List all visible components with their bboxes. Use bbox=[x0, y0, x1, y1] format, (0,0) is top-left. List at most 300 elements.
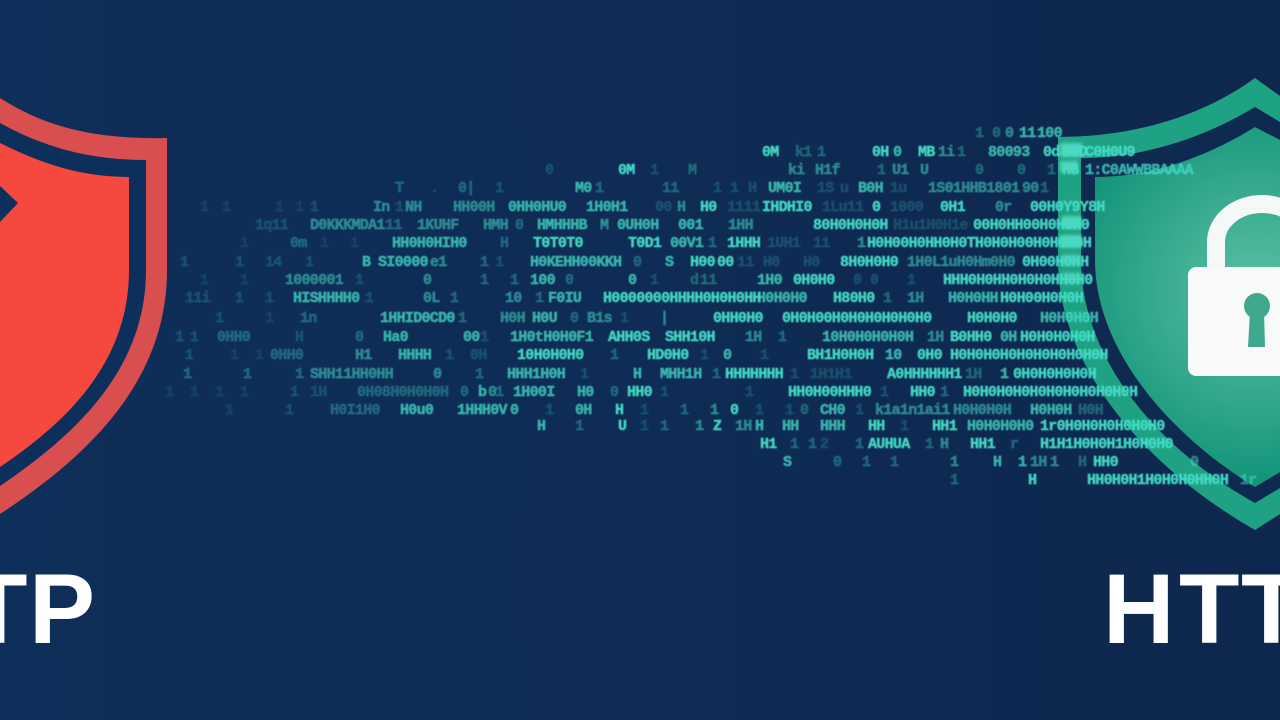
data stream: encrypted characters flowing from HTTP to HTTPS: 0 bbox=[565, 272, 574, 289]
data stream: encrypted characters flowing from HTTP to HTTPS: 1 bbox=[708, 235, 717, 252]
data stream: encrypted characters flowing from HTTP to HTTPS: 1 bbox=[957, 144, 966, 161]
data stream: encrypted characters flowing from HTTP to HTTPS: d bbox=[690, 272, 698, 289]
data stream: encrypted characters flowing from HTTP to HTTPS: HB bbox=[1062, 162, 1079, 179]
data stream: encrypted characters flowing from HTTP to HTTPS: 10H0H0H0H0H bbox=[822, 329, 913, 346]
data stream: encrypted characters flowing from HTTP to HTTPS: 1 bbox=[535, 290, 544, 307]
data stream: encrypted characters flowing from HTTP to HTTPS: 1 bbox=[495, 180, 504, 197]
data stream: encrypted characters flowing from HTTP to HTTPS: 0 bbox=[510, 402, 519, 419]
data stream: encrypted characters flowing from HTTP to HTTPS: 1H0H1 bbox=[586, 199, 628, 216]
data stream: encrypted characters flowing from HTTP to HTTPS: 1 bbox=[225, 402, 234, 419]
data stream: encrypted characters flowing from HTTP to HTTPS: AUHUA bbox=[868, 436, 910, 453]
data stream: encrypted characters flowing from HTTP to HTTPS: H1 bbox=[760, 436, 777, 453]
data stream: encrypted characters flowing from HTTP to HTTPS: H bbox=[633, 366, 641, 383]
data stream: encrypted characters flowing from HTTP to HTTPS: 0HH0 bbox=[270, 347, 304, 364]
data stream: encrypted characters flowing from HTTP to HTTPS: IHDHI0 bbox=[762, 199, 813, 216]
data stream: encrypted characters flowing from HTTP to HTTPS: HH bbox=[868, 418, 885, 435]
data stream: encrypted characters flowing from HTTP to HTTPS: 0d bbox=[1043, 144, 1060, 161]
data stream: encrypted characters flowing from HTTP to HTTPS: 0 bbox=[633, 254, 642, 271]
data stream: encrypted characters flowing from HTTP to HTTPS: 1 bbox=[695, 418, 704, 435]
data stream: encrypted characters flowing from HTTP to HTTPS: 14 bbox=[265, 254, 282, 271]
data stream: encrypted characters flowing from HTTP to HTTPS: AHH0S bbox=[608, 329, 650, 346]
data stream: encrypted characters flowing from HTTP to HTTPS: 1H bbox=[310, 384, 327, 401]
data stream: encrypted characters flowing from HTTP to HTTPS: M0 bbox=[575, 180, 592, 197]
data stream: encrypted characters flowing from HTTP to HTTPS: H0H0H0H bbox=[1040, 310, 1098, 327]
data stream: encrypted characters flowing from HTTP to HTTPS: 1 bbox=[877, 162, 886, 179]
data stream: encrypted characters flowing from HTTP to HTTPS: BH1H0H0H bbox=[807, 347, 873, 364]
data stream: encrypted characters flowing from HTTP to HTTPS: 0H0H00H0H0H0H0H0H0 bbox=[782, 310, 932, 327]
data stream: encrypted characters flowing from HTTP to HTTPS: 0 bbox=[800, 402, 809, 419]
data stream: encrypted characters flowing from HTTP to HTTPS: 0H bbox=[1000, 329, 1017, 346]
data stream: encrypted characters flowing from HTTP to HTTPS: Ha0 bbox=[383, 329, 409, 346]
data stream: encrypted characters flowing from HTTP to HTTPS: 1HH bbox=[728, 217, 753, 234]
data stream: encrypted characters flowing from HTTP to HTTPS: 1H bbox=[907, 290, 924, 307]
data stream: encrypted characters flowing from HTTP to HTTPS: 1 bbox=[862, 454, 871, 471]
data stream: encrypted characters flowing from HTTP to HTTPS: 1u bbox=[890, 180, 907, 197]
data stream: encrypted characters flowing from HTTP to HTTPS: 1 bbox=[940, 384, 949, 401]
data stream: encrypted characters flowing from HTTP to HTTPS: 1H0L1uH0Hm0H0 bbox=[907, 254, 1016, 271]
data stream: encrypted characters flowing from HTTP to HTTPS: 1 bbox=[575, 418, 584, 435]
data stream: encrypted characters flowing from HTTP to HTTPS: H0H0H0 bbox=[967, 310, 1018, 327]
data stream: encrypted characters flowing from HTTP to HTTPS: 1q11 bbox=[255, 217, 289, 234]
data stream: encrypted characters flowing from HTTP to HTTPS: ki bbox=[788, 162, 805, 179]
data stream: encrypted characters flowing from HTTP to HTTPS: 1 bbox=[925, 436, 934, 453]
data stream: encrypted characters flowing from HTTP to HTTPS: 0M bbox=[618, 162, 635, 179]
data stream: encrypted characters flowing from HTTP to HTTPS: 1 bbox=[480, 272, 489, 289]
data stream: encrypted characters flowing from HTTP to HTTPS: 0 bbox=[723, 347, 732, 364]
data stream: encrypted characters flowing from HTTP to HTTPS: 1 bbox=[495, 254, 504, 271]
data stream: encrypted characters flowing from HTTP to HTTPS: 0H1 bbox=[940, 199, 966, 216]
data stream: encrypted characters flowing from HTTP to HTTPS: 80H0H0H0H bbox=[813, 217, 888, 234]
data stream: encrypted characters flowing from HTTP to HTTPS: 0 bbox=[515, 217, 524, 234]
data stream: encrypted characters flowing from HTTP to HTTPS: b bbox=[478, 384, 487, 401]
data stream: encrypted characters flowing from HTTP to HTTPS: H0KEHH00KKH bbox=[530, 254, 621, 271]
data stream: encrypted characters flowing from HTTP to HTTPS: 1 bbox=[710, 402, 719, 419]
data stream: encrypted characters flowing from HTTP to HTTPS: 1 bbox=[700, 347, 709, 364]
data stream: encrypted characters flowing from HTTP to HTTPS: 1 bbox=[295, 366, 304, 383]
data stream: encrypted characters flowing from HTTP to HTTPS: 100 bbox=[1037, 125, 1063, 142]
data stream: encrypted characters flowing from HTTP to HTTPS: 11 bbox=[813, 235, 830, 252]
data stream: encrypted characters flowing from HTTP to HTTPS: r bbox=[1010, 436, 1018, 453]
data stream: encrypted characters flowing from HTTP to HTTPS: M bbox=[688, 162, 697, 179]
data stream: encrypted characters flowing from HTTP to HTTPS: 0HH0H0 bbox=[713, 310, 764, 327]
data stream: encrypted characters flowing from HTTP to HTTPS: 1HHH0V bbox=[457, 402, 508, 419]
data stream: encrypted characters flowing from HTTP to HTTPS: 1H bbox=[965, 366, 982, 383]
data stream: encrypted characters flowing from HTTP to HTTPS: H1 bbox=[355, 347, 372, 364]
data stream: encrypted characters flowing from HTTP to HTTPS: 00H0Y9Y8H bbox=[1030, 199, 1105, 216]
data stream: encrypted characters flowing from HTTP to HTTPS: H0I1H0 bbox=[330, 402, 381, 419]
data stream: encrypted characters flowing from HTTP to HTTPS: 0r bbox=[995, 199, 1012, 216]
data stream: encrypted characters flowing from HTTP to HTTPS: 1 bbox=[240, 235, 249, 252]
data stream: encrypted characters flowing from HTTP to HTTPS: 00 bbox=[463, 329, 480, 346]
data stream: encrypted characters flowing from HTTP to HTTPS: 0 bbox=[460, 384, 469, 401]
data stream: encrypted characters flowing from HTTP to HTTPS: 1 bbox=[365, 290, 374, 307]
data stream: encrypted characters flowing from HTTP to HTTPS: 1 bbox=[285, 402, 294, 419]
data stream: encrypted characters flowing from HTTP to HTTPS: 0 bbox=[893, 144, 902, 161]
data stream: encrypted characters flowing from HTTP to HTTPS: HHHH bbox=[398, 347, 431, 364]
data stream: encrypted characters flowing from HTTP to HTTPS: 1 bbox=[745, 384, 754, 401]
data stream: encrypted characters flowing from HTTP to HTTPS: H bbox=[940, 436, 948, 453]
data stream: encrypted characters flowing from HTTP to HTTPS: 2 bbox=[820, 436, 829, 453]
data stream: encrypted characters flowing from HTTP to HTTPS: 1 bbox=[222, 199, 231, 216]
data stream: encrypted characters flowing from HTTP to HTTPS: 0 bbox=[355, 329, 364, 346]
data stream: encrypted characters flowing from HTTP to HTTPS: 0H0H0H0H0H bbox=[1013, 366, 1096, 383]
data stream: encrypted characters flowing from HTTP to HTTPS: 1H0tH0H0F1 bbox=[510, 329, 594, 346]
data stream: encrypted characters flowing from HTTP to HTTPS: HH0H00HHH0 bbox=[788, 384, 872, 401]
data stream: encrypted characters flowing from HTTP to HTTPS: D0KKKMDA1 bbox=[310, 217, 385, 234]
data stream: encrypted characters flowing from HTTP to HTTPS: 1 bbox=[880, 384, 889, 401]
data stream: encrypted characters flowing from HTTP to HTTPS: HH00H bbox=[453, 199, 495, 216]
data stream: encrypted characters flowing from HTTP to HTTPS: 0 bbox=[488, 384, 497, 401]
data stream: encrypted characters flowing from HTTP to HTTPS: 1r0H0H0H0H0H0H0 bbox=[1040, 418, 1165, 435]
data stream: encrypted characters flowing from HTTP to HTTPS: H bbox=[537, 418, 545, 435]
data stream: encrypted characters flowing from HTTP to HTTPS: 1H bbox=[735, 418, 752, 435]
icon: red HTTP shield bbox=[0, 98, 167, 514]
data stream: encrypted characters flowing from HTTP to HTTPS: NH bbox=[405, 199, 422, 216]
data stream: encrypted characters flowing from HTTP to HTTPS: SHH11HH0HH bbox=[310, 366, 393, 383]
data stream: encrypted characters flowing from HTTP to HTTPS: S bbox=[665, 254, 674, 271]
data stream: encrypted characters flowing from HTTP to HTTPS: 1 bbox=[495, 384, 504, 401]
data stream: encrypted characters flowing from HTTP to HTTPS: U bbox=[920, 162, 929, 179]
data stream: encrypted characters flowing from HTTP to HTTPS: 1 bbox=[640, 418, 649, 435]
data stream: encrypted characters flowing from HTTP to HTTPS: 1 bbox=[680, 402, 689, 419]
data stream: encrypted characters flowing from HTTP to HTTPS: 1 bbox=[660, 418, 669, 435]
data stream: encrypted characters flowing from HTTP to HTTPS: 1 bbox=[183, 366, 192, 383]
data stream: encrypted characters flowing from HTTP to HTTPS: 1 bbox=[240, 272, 249, 289]
data stream: encrypted characters flowing from HTTP to HTTPS: H0H bbox=[500, 310, 525, 327]
data stream: encrypted characters flowing from HTTP to HTTPS: 1 bbox=[790, 366, 799, 383]
data stream: encrypted characters flowing from HTTP to HTTPS: H bbox=[677, 199, 685, 216]
data stream: encrypted characters flowing from HTTP to HTTPS: 1 bbox=[580, 366, 589, 383]
data stream: encrypted characters flowing from HTTP to HTTPS: T0T0T0 bbox=[533, 235, 584, 252]
data stream: encrypted characters flowing from HTTP to HTTPS: 1 bbox=[760, 347, 769, 364]
data stream: encrypted characters flowing from HTTP to HTTPS: 1 bbox=[1000, 366, 1009, 383]
data stream: encrypted characters flowing from HTTP to HTTPS: HH bbox=[782, 418, 799, 435]
data stream: encrypted characters flowing from HTTP to HTTPS: 0 bbox=[628, 272, 637, 289]
data stream: encrypted characters flowing from HTTP to HTTPS: T0D1 bbox=[628, 235, 662, 252]
data stream: encrypted characters flowing from HTTP to HTTPS: 0 bbox=[1005, 125, 1014, 142]
data stream: encrypted characters flowing from HTTP to HTTPS: HH0H0HIH0 bbox=[392, 235, 467, 252]
data stream: encrypted characters flowing from HTTP to HTTPS: H1u1H0H1e bbox=[893, 217, 968, 234]
data stream: encrypted characters flowing from HTTP to HTTPS: u bbox=[840, 180, 848, 197]
data stream: encrypted characters flowing from HTTP to HTTPS: H1H1H0H0H1H0H0H0 bbox=[1040, 436, 1174, 453]
data stream: encrypted characters flowing from HTTP to HTTPS: 00H0HH00H0H0H0 bbox=[973, 217, 1090, 234]
data stream: encrypted characters flowing from HTTP to HTTPS: 0H08H0H0H0H bbox=[357, 384, 448, 401]
data stream: encrypted characters flowing from HTTP to HTTPS: B0HH0 bbox=[950, 329, 992, 346]
data stream: encrypted characters flowing from HTTP to HTTPS: 10H0H0H0 bbox=[517, 347, 584, 364]
data stream: encrypted characters flowing from HTTP to HTTPS: H0H0H0H0H bbox=[1020, 329, 1095, 346]
data stream: encrypted characters flowing from HTTP to HTTPS: H0 bbox=[577, 384, 594, 401]
data stream: encrypted characters flowing from HTTP to HTTPS: 1 bbox=[907, 272, 916, 289]
data stream: encrypted characters flowing from HTTP to HTTPS: 1 bbox=[712, 366, 721, 383]
data stream: encrypted characters flowing from HTTP to HTTPS: H0U bbox=[532, 310, 558, 327]
data stream: encrypted characters flowing from HTTP to HTTPS: 0 bbox=[870, 272, 879, 289]
data stream: encrypted characters flowing from HTTP to HTTPS: B1s bbox=[587, 310, 613, 327]
data stream: encrypted characters flowing from HTTP to HTTPS: 1H bbox=[1030, 454, 1047, 471]
data stream: encrypted characters flowing from HTTP to HTTPS: 1 bbox=[200, 272, 209, 289]
data stream: encrypted characters flowing from HTTP to HTTPS: HHH bbox=[820, 418, 845, 435]
data stream: encrypted characters flowing from HTTP to HTTPS: MHH1H bbox=[660, 366, 702, 383]
data stream: encrypted characters flowing from HTTP to HTTPS: 1 bbox=[1050, 454, 1059, 471]
data stream: encrypted characters flowing from HTTP to HTTPS: 0 bbox=[833, 454, 842, 471]
data stream: encrypted characters flowing from HTTP to HTTPS: 0H0 bbox=[917, 347, 943, 364]
data stream: encrypted characters flowing from HTTP to HTTPS: 1:C0AWWBBAAAA bbox=[1085, 162, 1194, 179]
data stream: encrypted characters flowing from HTTP to HTTPS: 0L bbox=[423, 290, 440, 307]
data stream: encrypted characters flowing from HTTP to HTTPS: 1000 bbox=[890, 199, 924, 216]
data stream: encrypted characters flowing from HTTP to HTTPS: 10 bbox=[505, 290, 522, 307]
data stream: encrypted characters flowing from HTTP to HTTPS: H bbox=[993, 454, 1001, 471]
data stream: encrypted characters flowing from HTTP to HTTPS: 1 bbox=[595, 180, 604, 197]
data stream: encrypted characters flowing from HTTP to HTTPS: 1 bbox=[950, 454, 959, 471]
data stream: encrypted characters flowing from HTTP to HTTPS: 1KUHF bbox=[417, 217, 459, 234]
data stream: encrypted characters flowing from HTTP to HTTPS: 1 bbox=[200, 199, 209, 216]
data stream: encrypted characters flowing from HTTP to HTTPS: 1 bbox=[320, 235, 329, 252]
data stream: encrypted characters flowing from HTTP to HTTPS: 0UH0H bbox=[617, 217, 659, 234]
data stream: encrypted characters flowing from HTTP to HTTPS: H bbox=[755, 418, 763, 435]
data stream: encrypted characters flowing from HTTP to HTTPS: B0H bbox=[858, 180, 883, 197]
data stream: encrypted characters flowing from HTTP to HTTPS: 0H0H0 bbox=[793, 272, 835, 289]
data stream: encrypted characters flowing from HTTP to HTTPS: 1 bbox=[785, 402, 794, 419]
data stream: encrypted characters flowing from HTTP to HTTPS: 00 bbox=[655, 199, 672, 216]
data stream: encrypted characters flowing from HTTP to HTTPS: 1Lu11 bbox=[822, 199, 864, 216]
data stream: encrypted characters flowing from HTTP to HTTPS: 0 bbox=[992, 125, 1001, 142]
data stream: encrypted characters flowing from HTTP to HTTPS: 1 bbox=[650, 162, 659, 179]
data stream: encrypted characters flowing from HTTP to HTTPS: 1 bbox=[190, 384, 199, 401]
data stream: encrypted characters flowing from HTTP to HTTPS: SHH10H bbox=[665, 329, 715, 346]
data stream: encrypted characters flowing from HTTP to HTTPS: 1 bbox=[808, 436, 817, 453]
data stream: encrypted characters flowing from HTTP to HTTPS: H0H0H0H0H0H0H0H0H0H0H bbox=[963, 384, 1137, 401]
data stream: encrypted characters flowing from HTTP to HTTPS: H bbox=[500, 235, 508, 252]
data stream: encrypted characters flowing from HTTP to HTTPS: 0 bbox=[730, 402, 739, 419]
data stream: encrypted characters flowing from HTTP to HTTPS: 11 bbox=[700, 272, 717, 289]
data stream: encrypted characters flowing from HTTP to HTTPS: 1H bbox=[745, 329, 762, 346]
data stream: encrypted characters flowing from HTTP to HTTPS: 1 bbox=[295, 199, 304, 216]
data stream: encrypted characters flowing from HTTP to HTTPS: SI0000 bbox=[378, 254, 429, 271]
data stream: encrypted characters flowing from HTTP to HTTPS: 1HHID0CD0 bbox=[380, 310, 455, 327]
data stream: encrypted characters flowing from HTTP to HTTPS: HH1 bbox=[970, 436, 996, 453]
data stream: encrypted characters flowing from HTTP to HTTPS: H bbox=[1028, 472, 1036, 489]
data stream: encrypted characters flowing from HTTP to HTTPS: 1 bbox=[480, 254, 489, 271]
data stream: encrypted characters flowing from HTTP to HTTPS: 1S01HHB1801 bbox=[928, 180, 1020, 197]
data stream: encrypted characters flowing from HTTP to HTTPS: HH0 bbox=[1093, 454, 1119, 471]
data stream: encrypted characters flowing from HTTP to HTTPS: H bbox=[748, 180, 756, 197]
data stream: encrypted characters flowing from HTTP to HTTPS: CH0 bbox=[820, 402, 846, 419]
data stream: encrypted characters flowing from HTTP to HTTPS: H0 bbox=[700, 199, 717, 216]
data stream: encrypted characters flowing from HTTP to HTTPS: 001 bbox=[678, 217, 704, 234]
data stream: encrypted characters flowing from HTTP to HTTPS: 1 bbox=[855, 402, 864, 419]
data stream: encrypted characters flowing from HTTP to HTTPS: 1 bbox=[190, 329, 199, 346]
data stream: encrypted characters flowing from HTTP to HTTPS: H1f bbox=[815, 162, 841, 179]
data stream: encrypted characters flowing from HTTP to HTTPS: 1H00I bbox=[513, 384, 555, 401]
data stream: encrypted characters flowing from HTTP to HTTPS: H0H0HH bbox=[948, 290, 998, 307]
data stream: encrypted characters flowing from HTTP to HTTPS: H0H0H0H bbox=[953, 402, 1011, 419]
data stream: encrypted characters flowing from HTTP to HTTPS: 1 bbox=[857, 235, 866, 252]
data stream: encrypted characters flowing from HTTP to HTTPS: 1 bbox=[265, 310, 274, 327]
data stream: encrypted characters flowing from HTTP to HTTPS: 0 bbox=[1190, 454, 1199, 471]
data stream: encrypted characters flowing from HTTP to HTTPS: 1 bbox=[230, 347, 239, 364]
data stream: encrypted characters flowing from HTTP to HTTPS: 1 bbox=[310, 199, 319, 216]
data stream: encrypted characters flowing from HTTP to HTTPS: 1 bbox=[235, 290, 244, 307]
data stream: encrypted characters flowing from HTTP to HTTPS: k1a1n1ai1 bbox=[875, 402, 950, 419]
data stream: encrypted characters flowing from HTTP to HTTPS: 1 bbox=[640, 402, 649, 419]
data stream: encrypted characters flowing from HTTP to HTTPS: 1 bbox=[975, 125, 984, 142]
data stream: encrypted characters flowing from HTTP to HTTPS: In bbox=[373, 199, 390, 216]
data stream: encrypted characters flowing from HTTP to HTTPS: 1 bbox=[620, 310, 629, 327]
data stream: encrypted characters flowing from HTTP to HTTPS: H00 bbox=[690, 254, 716, 271]
data stream: encrypted characters flowing from HTTP to HTTPS: e1 bbox=[430, 254, 447, 271]
data stream: encrypted characters flowing from HTTP to HTTPS: 1000001 bbox=[285, 272, 344, 289]
data stream: encrypted characters flowing from HTTP to HTTPS: 1 bbox=[950, 472, 959, 489]
data stream: encrypted characters flowing from HTTP to HTTPS: 1H bbox=[927, 329, 944, 346]
data stream: encrypted characters flowing from HTTP to HTTPS: 1 bbox=[240, 384, 249, 401]
data stream: encrypted characters flowing from HTTP to HTTPS: 1 bbox=[355, 272, 364, 289]
data stream: encrypted characters flowing from HTTP to HTTPS: 100 bbox=[530, 272, 556, 289]
data stream: encrypted characters flowing from HTTP to HTTPS: H80H0 bbox=[833, 290, 875, 307]
data stream: encrypted characters flowing from HTTP to HTTPS: HMH bbox=[483, 217, 508, 234]
data stream: encrypted characters flowing from HTTP to HTTPS: HH0 bbox=[910, 384, 936, 401]
data stream: encrypted characters flowing from HTTP to HTTPS: 1 bbox=[817, 144, 826, 161]
data stream: encrypted characters flowing from HTTP to HTTPS: A0HHHHHH1 bbox=[887, 366, 962, 383]
data stream: encrypted characters flowing from HTTP to HTTPS: 1HHH bbox=[727, 235, 760, 252]
data stream: encrypted characters flowing from HTTP to HTTPS: U bbox=[618, 418, 627, 435]
data stream: encrypted characters flowing from HTTP to HTTPS: 1 bbox=[215, 310, 224, 327]
data stream: encrypted characters flowing from HTTP to HTTPS: H0H0H bbox=[1030, 402, 1072, 419]
data stream: encrypted characters flowing from HTTP to HTTPS: 0 bbox=[423, 272, 432, 289]
data stream: encrypted characters flowing from HTTP to HTTPS: 1H1H1 bbox=[810, 366, 852, 383]
data stream: encrypted characters flowing from HTTP to HTTPS: 0HH0HU0 bbox=[508, 199, 567, 216]
data stream: encrypted characters flowing from HTTP to HTTPS: 80093 bbox=[988, 144, 1030, 161]
data stream: encrypted characters flowing from HTTP to HTTPS: F0IU bbox=[548, 290, 582, 307]
data stream: encrypted characters flowing from HTTP to HTTPS: HISHHHH0 bbox=[293, 290, 360, 307]
data stream: encrypted characters flowing from HTTP to HTTPS: HHHHHHH bbox=[725, 366, 783, 383]
data stream: encrypted characters flowing from HTTP to HTTPS: 1 bbox=[275, 199, 284, 216]
data stream: encrypted characters flowing from HTTP to HTTPS: 90 bbox=[1022, 180, 1039, 197]
data stream: encrypted characters flowing from HTTP to HTTPS: 1 bbox=[900, 418, 909, 435]
highlights where data crosses the shield edge bbox=[1060, 143, 1082, 284]
data stream: encrypted characters flowing from HTTP to HTTPS: 0 bbox=[545, 162, 554, 179]
data stream: encrypted characters flowing from HTTP to HTTPS: H bbox=[615, 402, 623, 419]
data stream: encrypted characters flowing from HTTP to HTTPS: H0H00H0HH0H0TH0H0H00H0H0H0H bbox=[867, 235, 1091, 252]
data stream: encrypted characters flowing from HTTP to HTTPS: 1 bbox=[350, 235, 359, 252]
data stream: encrypted characters flowing from HTTP to HTTPS: 10 bbox=[885, 347, 902, 364]
data stream: encrypted characters flowing from HTTP to HTTPS: 1 bbox=[458, 310, 467, 327]
data stream: encrypted characters flowing from HTTP to HTTPS: 1 bbox=[165, 384, 174, 401]
data stream: encrypted characters flowing from HTTP to HTTPS: 1 bbox=[215, 384, 224, 401]
data stream: encrypted characters flowing from HTTP to HTTPS: 0 bbox=[570, 310, 579, 327]
data stream: encrypted characters flowing from HTTP to HTTPS: H0 bbox=[763, 254, 780, 271]
data stream: encrypted characters flowing from HTTP to HTTPS: 1 bbox=[395, 199, 404, 216]
data stream: encrypted characters flowing from HTTP to HTTPS: 1S bbox=[817, 180, 834, 197]
data stream: encrypted characters flowing from HTTP to HTTPS bbox=[165, 125, 1257, 489]
data stream: encrypted characters flowing from HTTP to HTTPS: 0 bbox=[433, 366, 442, 383]
data stream: encrypted characters flowing from HTTP to HTTPS: 0M bbox=[762, 144, 779, 161]
data stream: encrypted characters flowing from HTTP to HTTPS: | bbox=[660, 310, 668, 327]
data stream: encrypted characters flowing from HTTP to HTTPS: HD0H0 bbox=[647, 347, 689, 364]
data stream: encrypted characters flowing from HTTP to HTTPS: HHH0H0HH0H0H0HH0H0 bbox=[943, 272, 1093, 289]
data stream: encrypted characters flowing from HTTP to HTTPS: HH1 bbox=[932, 418, 958, 435]
data stream: encrypted characters flowing from HTTP to HTTPS: 0 bbox=[975, 162, 984, 179]
data stream: encrypted characters flowing from HTTP to HTTPS: 1 bbox=[445, 347, 454, 364]
data stream: encrypted characters flowing from HTTP to HTTPS: 11 bbox=[737, 254, 754, 271]
data stream: encrypted characters flowing from HTTP to HTTPS: H bbox=[295, 329, 303, 346]
data stream: encrypted characters flowing from HTTP to HTTPS: H0H0H0H0 bbox=[967, 418, 1034, 435]
data stream: encrypted characters flowing from HTTP to HTTPS: 1111 bbox=[727, 199, 761, 216]
data stream: encrypted characters flowing from HTTP to HTTPS: 1 bbox=[290, 384, 299, 401]
data stream: encrypted characters flowing from HTTP to HTTPS: UM0I bbox=[768, 180, 801, 197]
icon: padlock bbox=[1188, 204, 1280, 376]
data stream: encrypted characters flowing from HTTP to HTTPS: T bbox=[395, 180, 404, 197]
data stream: encrypted characters flowing from HTTP to HTTPS: 11 bbox=[662, 180, 679, 197]
data stream: encrypted characters flowing from HTTP to HTTPS: Z bbox=[713, 418, 722, 435]
data stream: encrypted characters flowing from HTTP to HTTPS: 1 bbox=[1018, 454, 1027, 471]
data stream: encrypted characters flowing from HTTP to HTTPS: H0 bbox=[803, 254, 820, 271]
data stream: encrypted characters flowing from HTTP to HTTPS: 1n bbox=[300, 310, 317, 327]
data stream: encrypted characters flowing from HTTP to HTTPS: H bbox=[1078, 454, 1086, 471]
data stream: encrypted characters flowing from HTTP to HTTPS: 1 bbox=[243, 366, 252, 383]
data stream: encrypted characters flowing from HTTP to HTTPS: M bbox=[600, 217, 609, 234]
data stream: encrypted characters flowing from HTTP to HTTPS: . bbox=[430, 180, 438, 197]
data stream: encrypted characters flowing from HTTP to HTTPS: 1 bbox=[510, 272, 519, 289]
data stream: encrypted characters flowing from HTTP to HTTPS: 1i bbox=[938, 144, 955, 161]
data stream: encrypted characters flowing from HTTP to HTTPS: H0H0H0 bbox=[757, 290, 808, 307]
data stream: encrypted characters flowing from HTTP to HTTPS: 0H bbox=[872, 144, 889, 161]
data stream: encrypted characters flowing from HTTP to HTTPS: 1 bbox=[265, 290, 274, 307]
data stream: encrypted characters flowing from HTTP to HTTPS: 0H bbox=[575, 402, 592, 419]
data stream: encrypted characters flowing from HTTP to HTTPS: 1 bbox=[180, 254, 189, 271]
data stream: encrypted characters flowing from HTTP to HTTPS: S bbox=[783, 454, 792, 471]
data stream: encrypted characters flowing from HTTP to HTTPS: H0000000HHHH0H0H0HH bbox=[603, 290, 761, 307]
data stream: encrypted characters flowing from HTTP to HTTPS: 1 bbox=[778, 329, 787, 346]
data stream: encrypted characters flowing from HTTP to HTTPS: C0H0U9 bbox=[1085, 144, 1136, 161]
icon: green HTTPS shield with padlock bbox=[1058, 78, 1280, 530]
data stream: encrypted characters flowing from HTTP to HTTPS: 1 bbox=[305, 254, 314, 271]
data stream: encrypted characters flowing from HTTP to HTTPS: 88D bbox=[1062, 144, 1088, 161]
data stream: encrypted characters flowing from HTTP to HTTPS: H0H bbox=[1078, 402, 1103, 419]
data stream: encrypted characters flowing from HTTP to HTTPS: 1 bbox=[660, 384, 669, 401]
data stream: encrypted characters flowing from HTTP to HTTPS: 1 bbox=[1047, 162, 1056, 179]
data stream: encrypted characters flowing from HTTP to HTTPS: 1 bbox=[650, 272, 659, 289]
data stream: encrypted characters flowing from HTTP to HTTPS: H0H0H0H0H0H0H0H0H0H bbox=[950, 347, 1108, 364]
data stream: encrypted characters flowing from HTTP to HTTPS: 0 bbox=[1017, 162, 1026, 179]
data stream: encrypted characters flowing from HTTP to HTTPS: U1 bbox=[892, 162, 909, 179]
data stream: encrypted characters flowing from HTTP to HTTPS: MB bbox=[918, 144, 935, 161]
data stream: encrypted characters flowing from HTTP to HTTPS: 0 bbox=[610, 384, 619, 401]
data stream: encrypted characters flowing from HTTP to HTTPS: 1 bbox=[475, 366, 484, 383]
data stream: encrypted characters flowing from HTTP to HTTPS: 1UH1 bbox=[767, 235, 801, 252]
data stream: encrypted characters flowing from HTTP to HTTPS: 1 bbox=[855, 436, 864, 453]
data stream: encrypted characters flowing from HTTP to HTTPS: 0 bbox=[872, 199, 881, 216]
data stream: encrypted characters flowing from HTTP to HTTPS: HH0H0H1H0H0H0HH0H bbox=[1087, 472, 1228, 489]
data stream: encrypted characters flowing from HTTP to HTTPS: HHH1H0H bbox=[507, 366, 565, 383]
data stream: encrypted characters flowing from HTTP to HTTPS: 1 bbox=[755, 402, 764, 419]
data stream: encrypted characters flowing from HTTP to HTTPS: 1H0 bbox=[757, 272, 783, 289]
data stream: encrypted characters flowing from HTTP to HTTPS: 0HH0 bbox=[217, 329, 251, 346]
data stream: encrypted characters flowing from HTTP to HTTPS: 11i bbox=[185, 290, 211, 307]
data stream: encrypted characters flowing from HTTP to HTTPS: 1 bbox=[175, 329, 184, 346]
data stream: encrypted characters flowing from HTTP to HTTPS: B bbox=[362, 254, 371, 271]
data stream: encrypted characters flowing from HTTP to HTTPS: 0H bbox=[470, 347, 487, 364]
data stream: encrypted characters flowing from HTTP to HTTPS: 0m bbox=[290, 235, 307, 252]
data stream: encrypted characters flowing from HTTP to HTTPS: HMHHHB bbox=[537, 217, 588, 234]
data stream: encrypted characters flowing from HTTP to HTTPS: H0H00H0H0H bbox=[1000, 290, 1083, 307]
data stream: encrypted characters flowing from HTTP to HTTPS: 1 bbox=[790, 436, 799, 453]
data stream: encrypted characters flowing from HTTP to HTTPS: 1 bbox=[610, 347, 619, 364]
data stream: encrypted characters flowing from HTTP to HTTPS: 0H00H0HH bbox=[1022, 254, 1088, 271]
data stream: encrypted characters flowing from HTTP to HTTPS: 1 bbox=[545, 402, 554, 419]
data stream: encrypted characters flowing from HTTP to HTTPS: 1 bbox=[255, 347, 264, 364]
data stream: encrypted characters flowing from HTTP to HTTPS: 1 bbox=[713, 180, 722, 197]
data stream: encrypted characters flowing from HTTP to HTTPS: 1 bbox=[730, 180, 739, 197]
data stream: encrypted characters flowing from HTTP to HTTPS: 1 bbox=[480, 329, 489, 346]
